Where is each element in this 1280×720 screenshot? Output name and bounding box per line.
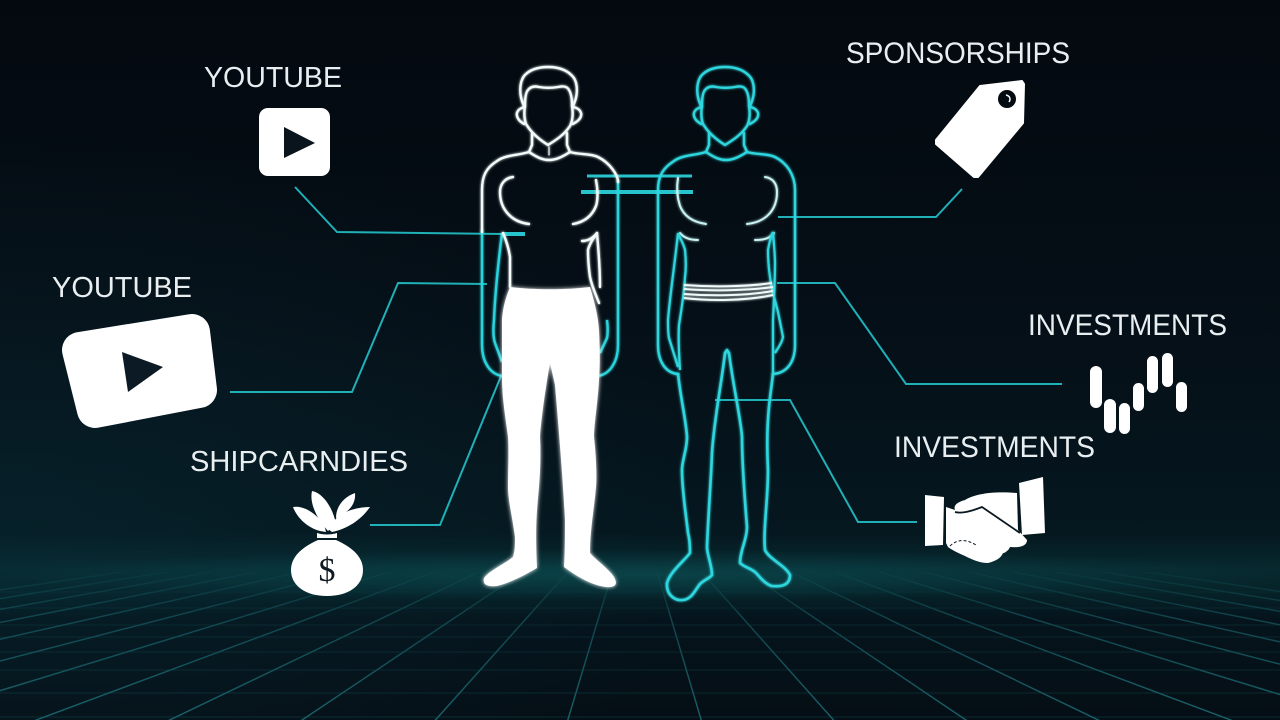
link between figures: lower bar bbox=[581, 190, 693, 194]
figure left: trousers and legs bbox=[484, 287, 616, 587]
icon: small play button bbox=[259, 108, 330, 176]
figure left: head and torso outline bbox=[482, 67, 618, 303]
icon: price tag bbox=[936, 81, 1024, 177]
figure right: inner arm lines bbox=[668, 232, 783, 373]
figure right: legs outline bbox=[667, 350, 790, 600]
icon: money bag bbox=[291, 491, 370, 596]
perspective floor grid bbox=[0, 576, 1280, 720]
connector: handshake to right figure bbox=[715, 400, 917, 522]
label: left YouTube: YOUTUBE bbox=[52, 272, 192, 304]
label: lower investments: INVESTMENTS bbox=[894, 431, 1095, 464]
connector: top YouTube to left figure bbox=[295, 187, 503, 234]
figure right: head and torso outline bbox=[658, 67, 795, 374]
connector lines bbox=[230, 176, 1062, 525]
link between figures: upper bar bbox=[587, 174, 692, 178]
icon: money bag: $ bbox=[318, 552, 336, 589]
connector stub: thick chest end bbox=[503, 232, 525, 236]
figure right: waistband bbox=[684, 283, 773, 300]
icon: candlestick chart bbox=[1090, 353, 1187, 434]
figure right: chest and inner arm detail bbox=[677, 177, 777, 240]
label: upper investments: INVESTMENTS bbox=[1028, 309, 1227, 342]
label: sponsorships: SPONSORSHIPS bbox=[846, 37, 1070, 70]
connector: sponsorships to right figure bbox=[778, 189, 962, 217]
figure: left, white silhouette bbox=[482, 67, 618, 587]
connector: money bag to left figure bbox=[370, 376, 501, 525]
label: top YouTube: YOUTUBE bbox=[204, 62, 342, 94]
icon: handshake bbox=[925, 477, 1045, 563]
connector: investments chart to right figure bbox=[777, 283, 1062, 384]
icon: large play button bbox=[80, 332, 199, 410]
label: money bag: SHIPCARNDIES bbox=[190, 446, 408, 478]
connector: left YouTube to left figure bbox=[230, 283, 487, 392]
figure left: arms bbox=[482, 180, 618, 376]
figure: right, cyan outline bbox=[658, 67, 795, 600]
